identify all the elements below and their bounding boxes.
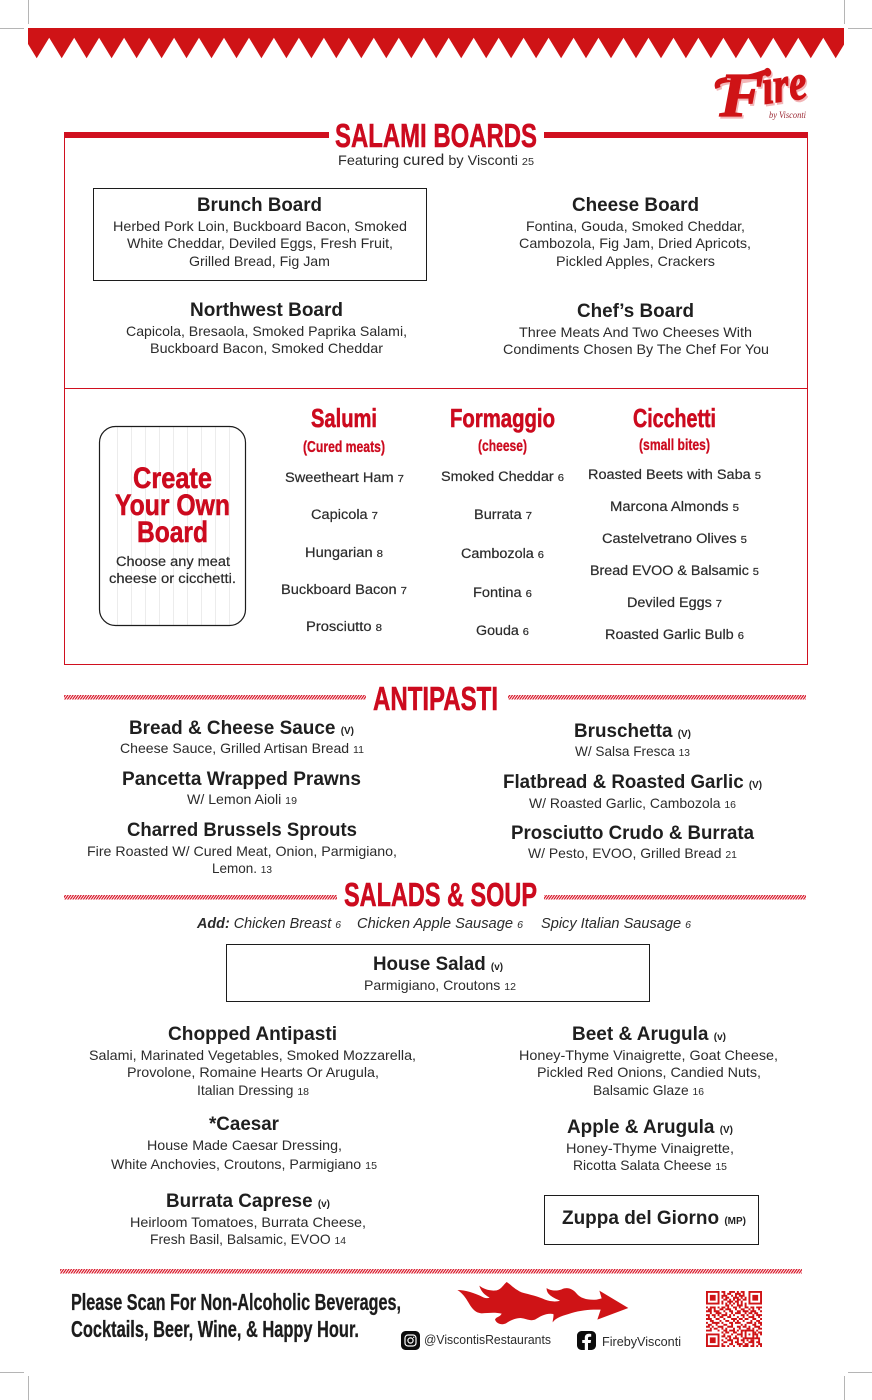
column: cicchetti: Castelvetrano Olives 5 bbox=[602, 531, 747, 546]
footer bbox=[60, 1269, 802, 1350]
item: caesar bbox=[111, 1114, 377, 1172]
item: apple and arugula: Apple & Arugula (V) bbox=[567, 1117, 733, 1138]
item: flatbread and roasted garlic: W/ Roasted Garlic, Cambozola 16 bbox=[529, 795, 736, 811]
column: salumi: Sweetheart Ham 7 bbox=[285, 470, 404, 485]
footer message: Please Scan For Non-Alcoholic Beverages, bbox=[71, 1289, 401, 1315]
board: chef's board: Chef’s Board bbox=[577, 301, 694, 322]
item: prosciutto crudo and burrata: W/ Pesto, EVOO, Grilled Bread 21 bbox=[528, 845, 737, 861]
item: prosciutto crudo and burrata bbox=[511, 823, 754, 861]
heading: salami boards: SALAMI BOARDS bbox=[335, 117, 537, 154]
board: cheese board: Fontina, Gouda, Smoked Cheddar, bbox=[526, 218, 745, 234]
board: northwest board: Buckboard Bacon, Smoked Cheddar bbox=[150, 340, 383, 356]
callout: create your own board: Choose any meat bbox=[116, 554, 230, 569]
item: caesar: *Caesar bbox=[209, 1114, 280, 1135]
logo: Fire by Visconti: F bbox=[720, 64, 765, 132]
column: salumi: Salumi bbox=[311, 403, 377, 433]
item: caesar: White Anchovies, Croutons, Parmigiano 15 bbox=[111, 1156, 377, 1172]
item: burrata caprese: Burrata Caprese (v) bbox=[166, 1191, 330, 1212]
item: apple and arugula: Honey-Thyme Vinaigrette, bbox=[566, 1140, 734, 1156]
add-ons line: Add: Chicken Breast 6 bbox=[196, 916, 341, 932]
footer message: Cocktails, Beer, Wine, & Happy Hour. bbox=[71, 1316, 359, 1342]
item: bread and cheese sauce: Cheese Sauce, Grilled Artisan Bread 11 bbox=[120, 740, 364, 756]
board: chef's board: Three Meats And Two Cheeses With bbox=[519, 324, 752, 340]
item: charred brussels sprouts: Fire Roasted W/ Cured Meat, Onion, Parmigiano, bbox=[87, 843, 397, 859]
footer message bbox=[71, 1289, 401, 1342]
logo: Fire by Visconti: ire bbox=[759, 55, 812, 117]
icon: facebook bbox=[577, 1331, 596, 1350]
item: apple and arugula bbox=[566, 1117, 734, 1173]
board: brunch board: White Cheddar, Deviled Eggs, Fresh Fruit, bbox=[127, 235, 393, 251]
column: cicchetti: Bread EVOO & Balsamic 5 bbox=[590, 563, 759, 578]
add-ons line: Spicy Italian Sausage 6 bbox=[541, 916, 691, 932]
board: cheese board: Cambozola, Fig Jam, Dried Apricots, bbox=[519, 235, 751, 251]
column: salumi: Buckboard Bacon 7 bbox=[281, 582, 407, 597]
subheading: featuring cured: Featuring cured by Visconti 25 bbox=[338, 152, 534, 169]
item: chopped antipasti: Salami, Marinated Vegetables, Smoked Mozzarella, bbox=[89, 1047, 416, 1063]
item: house salad: Parmigiano, Croutons 12 bbox=[364, 977, 516, 993]
item: beet and arugula: Beet & Arugula (v) bbox=[572, 1024, 726, 1045]
instagram handle: @ViscontisRestaurants bbox=[424, 1333, 551, 1347]
section: antipasti bbox=[64, 680, 806, 876]
item: prosciutto crudo and burrata: Prosciutto Crudo & Burrata bbox=[511, 823, 754, 844]
item: bread and cheese sauce: Bread & Cheese Sauce (V) bbox=[129, 718, 354, 739]
column: cicchetti bbox=[588, 403, 761, 642]
item: charred brussels sprouts: Lemon. 13 bbox=[212, 860, 272, 876]
item: apple and arugula: Ricotta Salata Cheese 15 bbox=[573, 1157, 727, 1173]
item: burrata caprese bbox=[130, 1191, 366, 1247]
board: brunch board bbox=[94, 188, 426, 280]
board: brunch board: Grilled Bread, Fig Jam bbox=[189, 253, 330, 269]
column: formaggio: Formaggio bbox=[450, 403, 555, 433]
item: house salad bbox=[226, 944, 650, 1002]
column: formaggio: Smoked Cheddar 6 bbox=[441, 469, 564, 484]
column: formaggio: Burrata 7 bbox=[474, 507, 532, 522]
item: bruschetta: Bruschetta (V) bbox=[574, 721, 691, 742]
board: chef's board bbox=[503, 301, 769, 357]
callout: create your own board: Your Own bbox=[115, 489, 230, 522]
panel: salami boards bbox=[64, 117, 808, 664]
item: chopped antipasti: Chopped Antipasti bbox=[168, 1024, 337, 1045]
board: cheese board bbox=[519, 195, 751, 269]
item: burrata caprese: Heirloom Tomatoes, Burrata Cheese, bbox=[130, 1214, 366, 1230]
board: northwest board bbox=[126, 300, 407, 356]
column: cicchetti: Roasted Garlic Bulb 6 bbox=[605, 627, 744, 642]
column: formaggio: (cheese) bbox=[478, 438, 527, 455]
logo: Fire by Visconti bbox=[717, 53, 812, 132]
board: northwest board: Capicola, Bresaola, Smoked Paprika Salami, bbox=[126, 323, 407, 339]
item: pancetta wrapped prawns: W/ Lemon Aioli 19 bbox=[187, 791, 297, 807]
board: northwest board: Northwest Board bbox=[190, 300, 343, 321]
item: charred brussels sprouts: Charred Brussels Sprouts bbox=[127, 820, 357, 841]
item: beet and arugula: Honey-Thyme Vinaigrette, Goat Cheese, bbox=[519, 1047, 778, 1063]
item: flatbread and roasted garlic: Flatbread & Roasted Garlic (V) bbox=[503, 772, 762, 793]
column: salumi: Capicola 7 bbox=[311, 507, 378, 522]
column: formaggio: Cambozola 6 bbox=[461, 546, 544, 561]
column: formaggio: Gouda 6 bbox=[476, 623, 529, 638]
logo: Fire by Visconti: ire bbox=[758, 53, 810, 115]
logo: Fire by Visconti: F bbox=[718, 62, 764, 130]
column: salumi bbox=[281, 403, 407, 634]
icon: flame arrow bbox=[457, 1282, 628, 1324]
item: caesar: House Made Caesar Dressing, bbox=[147, 1137, 342, 1153]
column: cicchetti: Cicchetti bbox=[633, 403, 716, 433]
callout: create your own board: Board bbox=[137, 516, 208, 549]
item: zuppa del giorno: Zuppa del Giorno (MP) bbox=[562, 1208, 746, 1229]
column: cicchetti: Marcona Almonds 5 bbox=[610, 499, 739, 514]
icon: instagram bbox=[401, 1331, 420, 1350]
heading: salads and soup: SALADS & SOUP bbox=[344, 876, 537, 913]
section: salads and soup bbox=[64, 876, 806, 1247]
column: formaggio: Fontina 6 bbox=[473, 585, 532, 600]
item: charred brussels sprouts bbox=[87, 820, 397, 876]
callout: create your own board: cheese or cicchetti. bbox=[109, 571, 236, 586]
item: beet and arugula: Balsamic Glaze 16 bbox=[593, 1082, 704, 1098]
banner: red zigzag bbox=[28, 28, 844, 58]
board: cheese board: Pickled Apples, Crackers bbox=[556, 253, 715, 269]
column: cicchetti: Roasted Beets with Saba 5 bbox=[588, 467, 761, 482]
item: bruschetta: W/ Salsa Fresca 13 bbox=[575, 743, 690, 759]
column: cicchetti: (small bites) bbox=[639, 437, 710, 454]
item: pancetta wrapped prawns bbox=[122, 769, 361, 807]
board: cheese board: Cheese Board bbox=[572, 195, 699, 216]
heading: antipasti: ANTIPASTI bbox=[373, 680, 498, 717]
item: beet and arugula bbox=[519, 1024, 778, 1098]
item: zuppa del giorno bbox=[544, 1196, 758, 1244]
item: beet and arugula: Pickled Red Onions, Candied Nuts, bbox=[537, 1064, 761, 1080]
add-ons line: Chicken Apple Sausage 6 bbox=[357, 916, 523, 932]
item: chopped antipasti bbox=[89, 1024, 416, 1098]
item: chopped antipasti: Provolone, Romaine Hearts Or Arugula, bbox=[127, 1064, 379, 1080]
facebook handle: FirebyVisconti bbox=[602, 1334, 681, 1349]
board: brunch board: Brunch Board bbox=[197, 195, 322, 216]
column: cicchetti: Deviled Eggs 7 bbox=[627, 595, 722, 610]
add-ons line bbox=[196, 916, 691, 932]
item: bruschetta bbox=[574, 721, 691, 759]
item: flatbread and roasted garlic bbox=[503, 772, 762, 811]
item: burrata caprese: Fresh Basil, Balsamic, EVOO 14 bbox=[150, 1231, 346, 1247]
column: salumi: Prosciutto 8 bbox=[306, 619, 382, 634]
item: house salad: House Salad (v) bbox=[373, 954, 503, 975]
item: bread and cheese sauce bbox=[120, 718, 364, 756]
item: pancetta wrapped prawns: Pancetta Wrapped Prawns bbox=[122, 769, 361, 790]
board: brunch board: Herbed Pork Loin, Buckboard Bacon, Smoked bbox=[113, 218, 407, 234]
board: chef's board: Condiments Chosen By The Chef For You bbox=[503, 341, 769, 357]
callout: create your own board bbox=[100, 426, 246, 626]
column: salumi: (Cured meats) bbox=[303, 439, 385, 456]
item: chopped antipasti: Italian Dressing 18 bbox=[197, 1082, 309, 1098]
column: formaggio bbox=[441, 403, 564, 638]
column: salumi: Hungarian 8 bbox=[305, 545, 383, 560]
icon: qr code bbox=[706, 1291, 762, 1347]
logo: Fire by Visconti: by Visconti bbox=[769, 110, 806, 120]
callout: create your own board: Create bbox=[133, 462, 212, 495]
